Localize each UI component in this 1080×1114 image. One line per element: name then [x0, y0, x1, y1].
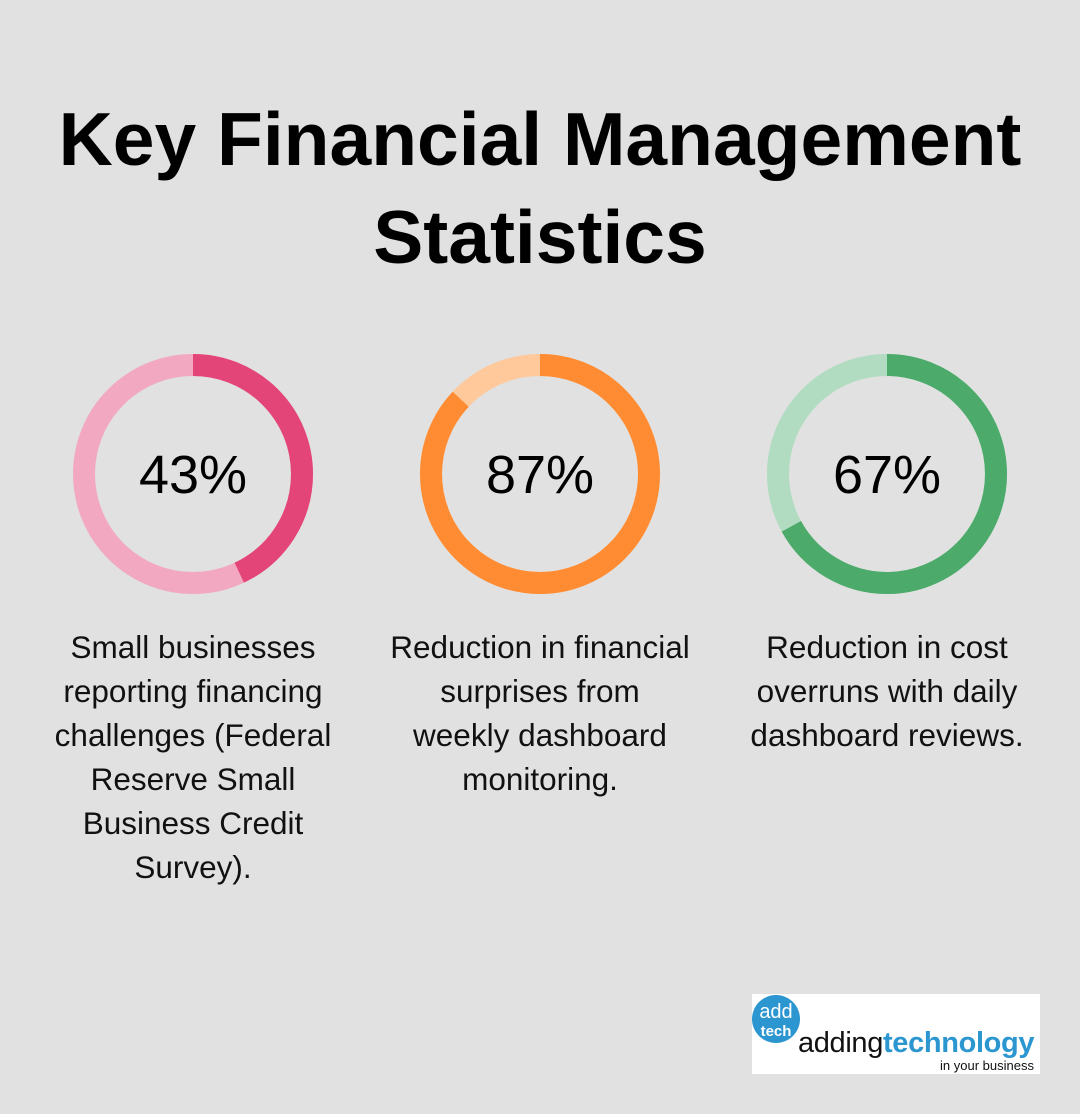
logo: add [759, 1001, 793, 1023]
text: stat 3 description: overruns with daily [757, 673, 1017, 709]
donut: 67%: 67% [833, 445, 941, 505]
text: stat 1 description: Survey). [134, 849, 252, 885]
donut: 43% [73, 354, 313, 594]
logo [752, 994, 1040, 1074]
title: Key Financial Management [59, 97, 1021, 181]
donut: 67% [767, 354, 1007, 594]
logo: tech [761, 1023, 791, 1040]
text: stat 1 description: Reserve Small [91, 761, 295, 797]
text: stat 1 description: Small businesses [70, 629, 316, 665]
text: stat 2 description: monitoring. [462, 761, 618, 797]
donut: 43%: 43% [139, 445, 247, 505]
donut: 87%: 87% [486, 445, 594, 505]
title: Statistics [373, 195, 707, 279]
donut: 87% [420, 354, 660, 594]
text: stat 3 description: dashboard reviews. [750, 717, 1024, 753]
logo: addingtechnology [798, 1027, 1034, 1059]
title [59, 97, 1021, 279]
text: stat 1 description: reporting financing [63, 673, 323, 709]
text: stat 2 description: weekly dashboard [413, 717, 667, 753]
logo: in your business [940, 1058, 1034, 1073]
text: stat 3 description [750, 629, 1024, 753]
text: stat 2 description: surprises from [440, 673, 640, 709]
text: stat 1 description: Business Credit [83, 805, 303, 841]
text: stat 2 description [390, 629, 690, 797]
text: stat 3 description: Reduction in cost [766, 629, 1008, 665]
text: stat 1 description: challenges (Federal [55, 717, 331, 753]
text: stat 1 description [55, 629, 331, 885]
text: stat 2 description: Reduction in financial [390, 629, 690, 665]
